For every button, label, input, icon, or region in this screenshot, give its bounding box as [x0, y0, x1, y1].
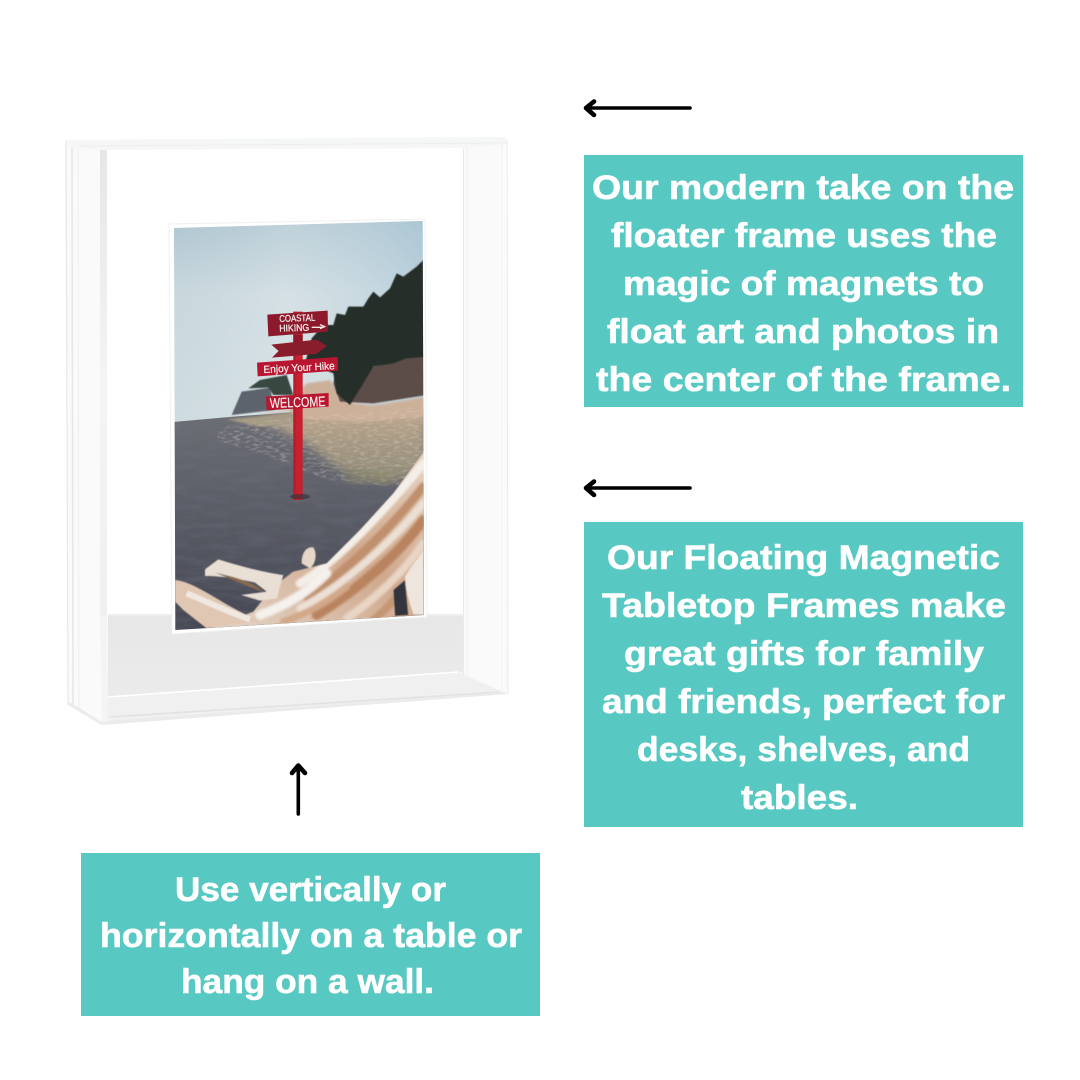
callout: vertical or horizontal use	[81, 853, 540, 1016]
framed photo: coastal hiking sign on a beach	[170, 218, 427, 633]
sky	[170, 218, 427, 432]
beach sand	[170, 410, 427, 633]
callout: gifts for family and friends	[584, 522, 1023, 827]
sign: enjoy your hike: Enjoy Your Hike	[263, 361, 335, 376]
callout: modern floater frame: float art and photos in	[607, 313, 999, 351]
cliff	[232, 388, 275, 415]
arrow pointing up to frame base	[292, 766, 305, 814]
dune and dry grass	[260, 403, 427, 482]
callout: gifts for family and friends: tables.	[741, 779, 858, 817]
sign: coastal hiking: HIKING	[279, 323, 309, 335]
callout: vertical or horizontal use: horizontally on a table or	[100, 917, 522, 955]
callout: gifts for family and friends: great gifts for family	[624, 635, 984, 673]
sign: welcome: WELCOME	[270, 393, 326, 411]
arrow pointing to frame middle	[586, 482, 690, 495]
base shelf	[68, 616, 508, 725]
callout: modern floater frame: Our modern take on the	[592, 169, 1014, 207]
callout: gifts for family and friends: Our Floating Magnetic	[607, 539, 1000, 577]
bare shrubs	[333, 355, 427, 403]
white mat	[107, 148, 463, 616]
sign: coastal hiking: COASTAL	[279, 313, 316, 325]
callout: gifts for family and friends: and friends, perfect for	[602, 683, 1005, 721]
callout: gifts for family and friends: Tabletop Frames make	[602, 587, 1006, 625]
photo white border	[169, 219, 427, 634]
sign: coastal hiking	[267, 311, 328, 336]
grey lower panel	[108, 616, 463, 697]
tree line	[303, 260, 427, 405]
frame body and side panels	[65, 137, 508, 725]
sign post	[293, 312, 303, 500]
callout: modern floater frame	[584, 155, 1023, 407]
callout: gifts for family and friends: desks, shelves, and	[637, 731, 970, 769]
callout: modern floater frame: the center of the frame.	[596, 361, 1011, 399]
callout: vertical or horizontal use: Use vertically or	[175, 871, 446, 909]
acrylic floating frame	[65, 137, 508, 725]
sign: enjoy your hike	[257, 357, 338, 376]
driftwood	[175, 452, 424, 628]
callout: modern floater frame: floater frame uses the	[611, 217, 997, 255]
callout: vertical or horizontal use: hang on a wall.	[181, 963, 434, 1001]
sign: small arrow	[271, 340, 327, 358]
callout: modern floater frame: magic of magnets to	[623, 265, 984, 303]
arrow pointing to frame top	[586, 102, 690, 115]
